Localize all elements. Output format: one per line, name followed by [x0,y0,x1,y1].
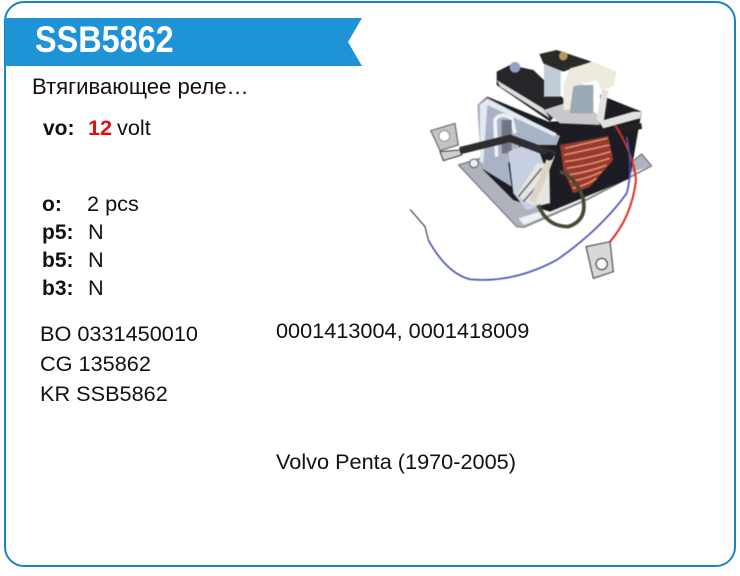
spec: voltage [43,115,151,140]
lower loop wire [538,172,584,227]
copper coil [560,136,613,193]
spec: b3 [42,275,104,300]
thin black wire end [410,209,428,240]
application: Volvo Penta (1970-2005) [276,449,516,474]
left lug and black cable [431,123,555,202]
coil frame back [477,95,642,212]
upper switch body [539,50,642,128]
illustration: solenoid relay [409,49,653,282]
text: 2 pcs [87,191,139,216]
blue wire [428,137,630,280]
cross reference: BO: BO 0331450010 [40,321,198,346]
text: volt [117,115,151,140]
text: 12 [88,115,112,140]
heading ribbon [5,18,362,66]
spec: b5: b5: [42,249,74,272]
base plate [458,154,652,227]
text: N [88,247,104,272]
text: N [88,219,104,244]
top terminal stack [497,62,600,125]
red wire with lug [586,125,636,278]
title: SSB5862 [35,19,174,60]
spec: b3: b3: [42,277,74,300]
left frame plate [477,98,560,187]
cross reference: KR: KR SSB5862 [40,381,168,406]
spec: p5 [42,219,104,244]
spec: o [42,191,139,216]
spec: o: o: [42,193,62,216]
OEM numbers: 0001413004, 0001418009 [276,318,529,343]
spec: voltage: vo: [43,117,74,140]
spec: b5 [42,247,104,272]
front bracket [508,143,548,210]
description text: Втягивающее реле… [32,74,249,99]
text: N [88,275,104,300]
spec: p5: p5: [42,221,74,244]
top right cable sleeve [613,126,642,130]
cross reference: CG: CG 135862 [40,351,151,376]
